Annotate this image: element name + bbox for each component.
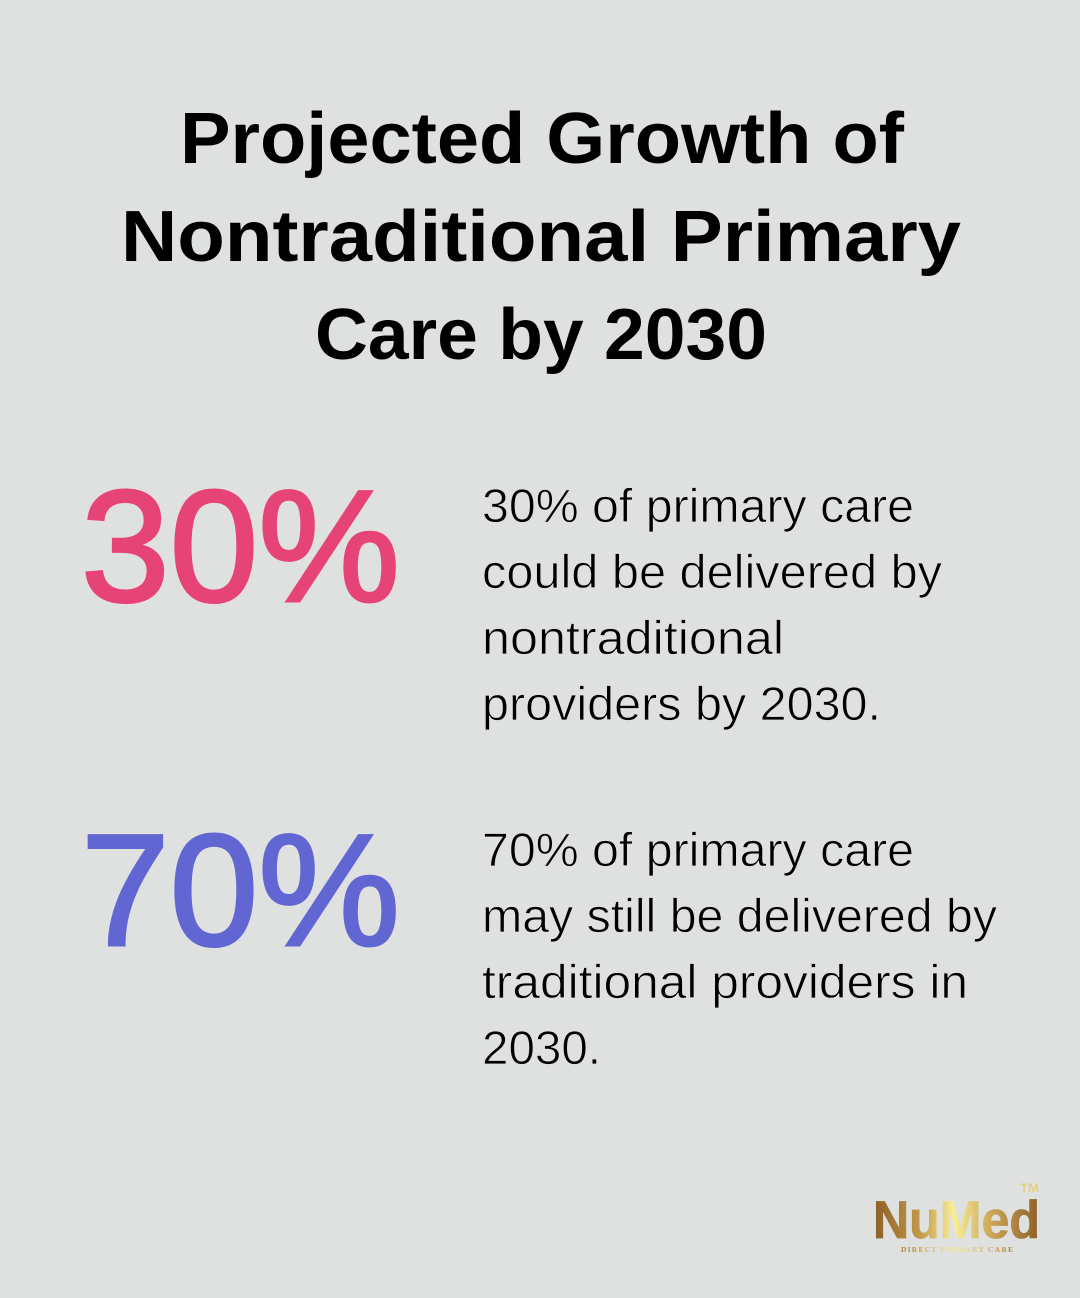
description: 30%: could be delivered by bbox=[482, 545, 943, 598]
stat: 70%: 70% bbox=[81, 801, 400, 979]
description: 30%: nontraditional bbox=[482, 611, 784, 664]
description: 70%: 70% of primary care bbox=[482, 823, 914, 876]
title: Projected Growth of bbox=[180, 99, 905, 179]
description: 70%: may still be delivered by bbox=[482, 889, 998, 942]
logo: NuMed: TM bbox=[1020, 1181, 1039, 1195]
description: 30% bbox=[482, 479, 943, 730]
description: 30%: 30% of primary care bbox=[482, 479, 914, 532]
stat: 30%: 30% bbox=[81, 457, 400, 635]
description: 30%: providers by 2030. bbox=[482, 677, 881, 730]
logo: NuMed: DIRECT PRIMARY CARE bbox=[901, 1245, 1013, 1254]
logo: NuMed: NuMed bbox=[873, 1191, 1040, 1250]
description: 70% bbox=[482, 823, 998, 1074]
title: Nontraditional Primary bbox=[121, 197, 961, 277]
title: Care by 2030 bbox=[315, 295, 767, 375]
description: 70%: 2030. bbox=[482, 1021, 601, 1074]
title bbox=[121, 99, 961, 375]
description: 70%: traditional providers in bbox=[482, 955, 968, 1008]
